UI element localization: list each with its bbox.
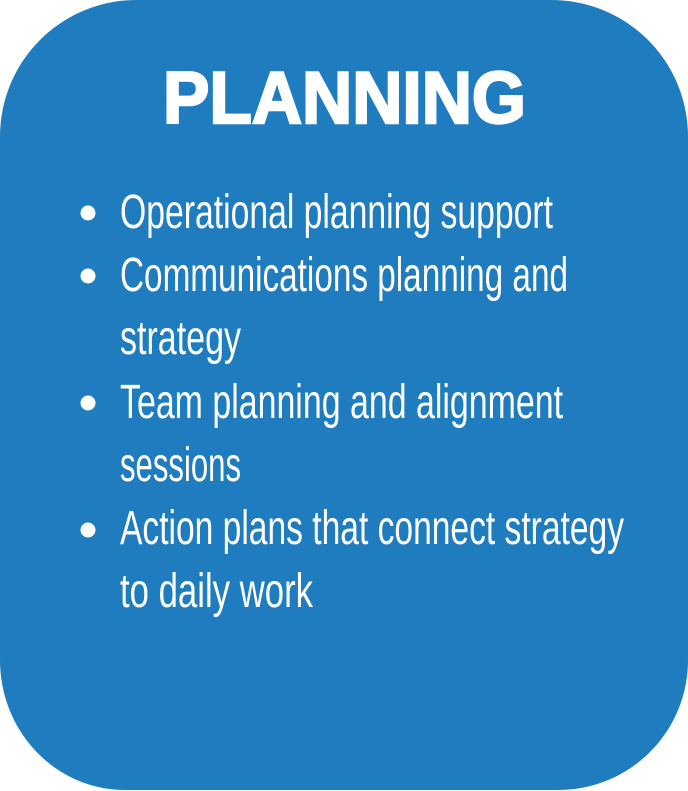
item: team planning and alignment sessions <box>80 376 563 492</box>
title: PLANNING <box>163 58 526 139</box>
item: action plans: to daily work <box>120 565 314 618</box>
item: action plans <box>80 502 624 618</box>
bullet list <box>80 186 624 618</box>
item: communications planning and strategy: strategy <box>120 312 241 365</box>
item: team planning and alignment sessions: sessions <box>120 439 241 492</box>
item: communications planning and strategy <box>80 249 568 365</box>
